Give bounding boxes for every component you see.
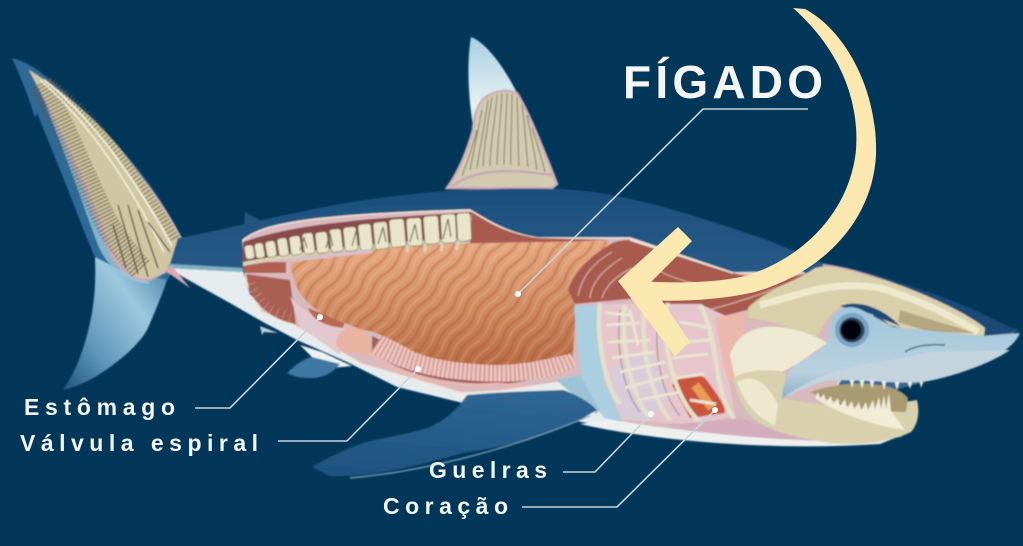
lower teeth [815,392,905,430]
muscle lower [246,274,296,324]
pectoral fin edge [350,416,590,478]
skull dark pocket [898,310,975,333]
valve lower channel [368,352,520,386]
vertebral column [243,212,472,266]
pectoral fin [312,390,597,476]
gill cover hollow [737,379,778,425]
pale strip under column [290,249,372,262]
vertebra arcs [300,219,451,250]
leader: Guelras [563,411,654,472]
upper teeth [850,380,923,389]
leader: Estômago [195,314,323,408]
eye brow dark [840,304,900,326]
spiral valve [368,336,573,386]
peduncle pink tab [164,266,190,288]
nostril fold [905,345,945,352]
intestine bend [336,327,382,358]
snout top blue [823,263,1018,342]
arrow curve [640,8,876,301]
pink interior wedge [290,296,345,355]
snout pink stripe [820,264,985,330]
tail lower lobe [63,235,167,390]
first dorsal fin [447,37,557,188]
ventral fin [287,345,352,378]
dorsal fin base arc [452,171,552,186]
leader: Fígado [515,109,808,297]
body back [168,189,1018,440]
neural spines [407,242,458,252]
blue gill cover [574,305,622,422]
cheek bone [730,327,827,378]
back highlight line [630,240,733,273]
tail ray bands [40,84,142,270]
lower jaw [733,371,918,444]
muscle upper strip [244,262,286,273]
dorsal fin tip [468,37,517,150]
small second dorsal fin [244,212,263,232]
heading: FÍGADO: FÍGADO [623,56,823,108]
tail fin [12,58,183,390]
tail cartilage [29,70,183,279]
lilac lower gill [610,350,668,420]
valve base [372,336,573,384]
fin white base [300,345,352,368]
blue base under pectoral [556,375,600,414]
liver [290,241,610,365]
left muscle block [244,262,296,324]
peduncle stripe [168,266,243,270]
face lower shade [782,350,1010,399]
face [782,307,1020,399]
pink upper-right throat [715,312,745,385]
liver shape [290,241,610,365]
vertebral band [243,212,472,263]
arrow [618,8,876,356]
vertebrae [244,213,472,260]
fin blade [287,357,340,378]
small keel fin [260,326,278,335]
shark illustration [12,37,1020,478]
skull upper [748,266,985,340]
valve folds [377,343,572,371]
gill region [556,303,745,425]
label: Estômago: Estômago [24,394,175,420]
eye [835,313,869,347]
gill arches [599,303,735,422]
throat and lower pink panel [668,418,880,445]
heart [672,375,725,418]
mouth interior [810,383,908,412]
gill rakers [606,305,716,404]
arrow head [618,227,692,356]
dorsal fin cartilage [447,91,557,188]
muscle mass [568,240,812,318]
muscle fibres [578,252,795,312]
head [730,263,1020,444]
dorsal muscle band [470,212,610,246]
tail pink edge [29,70,183,281]
shoulder muscle [568,240,812,318]
tail upper lobe [12,58,183,280]
belly [168,268,900,445]
label: Guelras: Guelras [429,457,547,483]
stomach lobe [308,308,345,328]
liver stripes [290,241,610,365]
skull ridge light [760,286,978,332]
label: Coração: Coração [383,493,508,519]
pink gill box [600,304,735,425]
cut-away panel [243,210,900,445]
leader: Válvula espiral [278,366,421,441]
tail pale edge [45,104,150,284]
dorsal fin rays [462,93,545,176]
label: Válvula espiral: Válvula espiral [20,430,258,456]
leader: Coração [522,407,718,507]
belly white rim [580,420,900,446]
